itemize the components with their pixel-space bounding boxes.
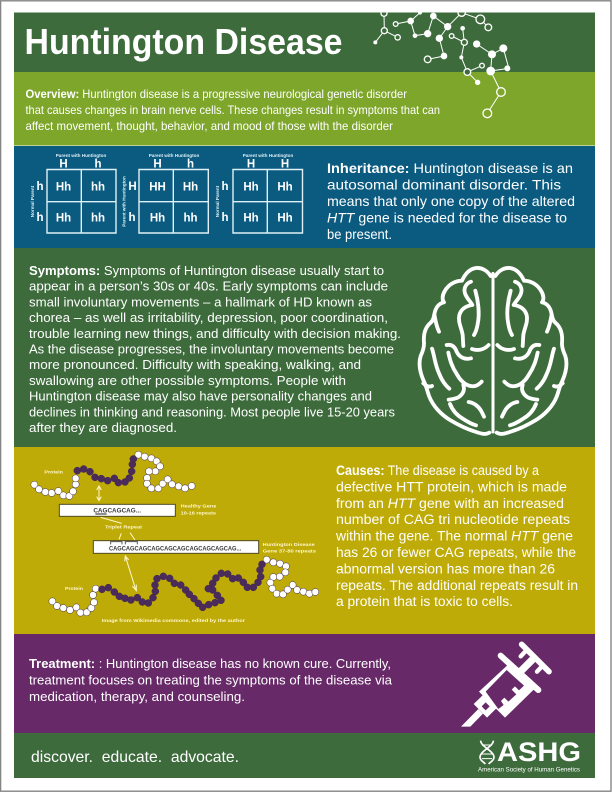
diagram labels: Protein [44,469,63,475]
causes text: repeats. The additional repeats result in [336,578,578,593]
punnett square: affected parent with normal parent: Hh [56,182,71,194]
punnett square: homozygous parent with normal parent: Parent with Huntington [243,153,293,158]
panel: treatment [14,634,595,733]
inheritance text: autosomal dominant disorder. This [327,178,561,192]
punnett square: homozygous parent with normal parent [215,153,302,233]
punnett square: homozygous parent with normal parent: Hh [243,212,259,224]
symptoms text: after they are diagnosed. [29,420,177,435]
logo: ASHG: ASHG [497,737,581,767]
punnett square: two-allele parent cross: HH [149,182,166,194]
punnett square: homozygous parent with normal parent: H [281,158,289,170]
logo: ASHG: American Society of Human Genetics [478,766,580,774]
overview text: Overview: Huntington disease is a progressive neurological genetic disorder [26,87,407,101]
symptoms text: As the disease progresses, the involuntary movements become [29,342,394,356]
causes text: abnormal version has more than 26 [336,561,555,576]
huntington gene box: CAGCAGCAGCAGCAGCAGCAGCAGCAGCAG... [109,545,242,552]
symptoms text: Huntington disease may also have personality changes and [29,389,372,404]
healthy gene box: CAGCAGCAG... [93,507,141,514]
punnett square: affected parent with normal parent: hh [91,182,105,194]
punnett square: affected parent with normal parent: h [94,158,102,170]
title: Huntington Disease [24,21,342,62]
causes text: number of CAG tri nucleotide repeats [336,512,570,527]
diagram labels: Gene 37-80 repeats [263,549,316,555]
diagram: CAG repeat proteins and genes [31,451,319,624]
panel: inheritance [14,146,595,248]
punnett square: homozygous parent with normal parent: h [221,212,229,224]
causes text: from an HTT gene with an increased [336,496,564,511]
causes text: Causes: The disease is caused by a [336,463,540,478]
punnett square: two-allele parent cross: Parent with Huntington [122,176,126,227]
diagram labels: 10-16 repeats [181,510,216,516]
punnett square: two-allele parent cross [122,153,208,233]
punnett square: two-allele parent cross: H [128,181,137,193]
punnett square: affected parent with normal parent: hh [91,212,105,224]
inheritance text: be present. [327,227,392,242]
symptoms text: declines in thinking and reasoning. Most people live 15-20 years [29,404,395,419]
diagram labels: Triplet Repeat [105,525,142,531]
punnett square: affected parent with normal parent: H [59,158,68,170]
causes text: within the gene. The normal HTT gene [335,529,573,544]
symptoms text: small involuntary movements – a hallmark of HD known as [29,294,372,309]
causes text: a protein that is toxic to cells. [336,594,513,609]
inheritance text [327,161,575,242]
punnett square: affected parent with normal parent: h [36,181,44,193]
punnett square: homozygous parent with normal parent: h [221,181,229,193]
punnett square: homozygous parent with normal parent: Hh [277,182,293,194]
treatment text: Treatment: : Huntington disease has no known cure. Currently, [29,656,391,671]
punnett square: homozygous parent with normal parent: Hh [243,182,259,194]
symptoms text [29,263,401,435]
symptoms text: appear in a person’s 30s or 40s. Early symptoms can include [29,279,388,294]
healthy protein bead chain [31,451,195,499]
huntington protein bead chain [49,556,319,616]
treatment text [29,656,393,704]
punnett square: two-allele parent cross: Parent with Huntington [149,153,199,158]
panel: overview [14,72,595,146]
panel: header [14,12,595,72]
arrows and triplet connectors [97,486,136,591]
panel: causes [14,447,595,634]
panel: symptoms [14,248,595,447]
inheritance text: means that only one copy of the altered [327,194,575,209]
symptoms text: chorea – as well as irritability, depression, poor coordination, [29,310,388,325]
panel: footer [14,733,595,778]
icon: molecule network [373,9,510,118]
punnett square: affected parent with normal parent: Hh [56,212,71,224]
treatment text: medication, therapy, and counseling. [29,689,245,704]
symptoms text: Symptoms: Symptoms of Huntington disease usually start to [29,263,384,278]
punnett square: homozygous parent with normal parent: Hh [277,212,293,224]
punnett square: affected parent with normal parent [30,153,116,233]
overview text: that causes changes in brain nerve cells. These changes result in symptoms that can [26,103,440,117]
diagram labels: Image from Wikimedia commons, edited by the author [102,618,245,624]
huntington gene box [93,541,259,553]
inheritance text: HTT gene is needed for the disease to [327,210,567,226]
causes text [335,463,578,609]
overview text: affect movement, thought, behavior, and mood of those with the disorder [26,119,393,133]
diagram labels: Huntington Disease [263,542,315,548]
diagram labels: Healthy Gene [181,503,217,509]
punnett square: two-allele parent cross: h [187,158,194,170]
punnett square: affected parent with normal parent: Normal Parent [30,185,35,217]
punnett square: two-allele parent cross: Hh [183,182,198,194]
punnett square: two-allele parent cross: Hh [150,212,165,224]
punnett square: two-allele parent cross: h [128,212,136,224]
overview text [26,87,440,133]
punnett square: two-allele parent cross: H [153,158,162,170]
causes text: defective HTT protein, which is made [336,479,567,494]
punnett square: two-allele parent cross: hh [183,212,198,224]
diagram labels: Protein [65,586,83,592]
symptoms text: more pronounced. Difficulty with speaking, walking, and [29,357,361,372]
causes text: has 26 or fewer CAG repeats, while the [336,545,576,560]
diagram labels [44,469,316,624]
healthy gene box [59,504,175,516]
symptoms text: swallowing are other possible symptoms. People with [29,373,346,388]
logo: ASHG [478,737,581,774]
tagline: discover. educate. advocate. [31,749,239,766]
punnett square: affected parent with normal parent: Parent with Huntington [56,153,106,158]
punnett square: homozygous parent with normal parent: H [247,158,255,170]
icon: brain [420,268,566,434]
symptoms text: trouble learning new things, and difficulty with decision making. [29,326,401,341]
punnett square: homozygous parent with normal parent: Normal Parent [215,185,220,217]
icon: syringe [461,644,549,727]
treatment text: treatment focuses on treating the symptoms of the disease via [29,672,393,688]
punnett square: affected parent with normal parent: h [36,212,44,224]
inheritance text: Inheritance: Huntington disease is an [327,161,573,176]
